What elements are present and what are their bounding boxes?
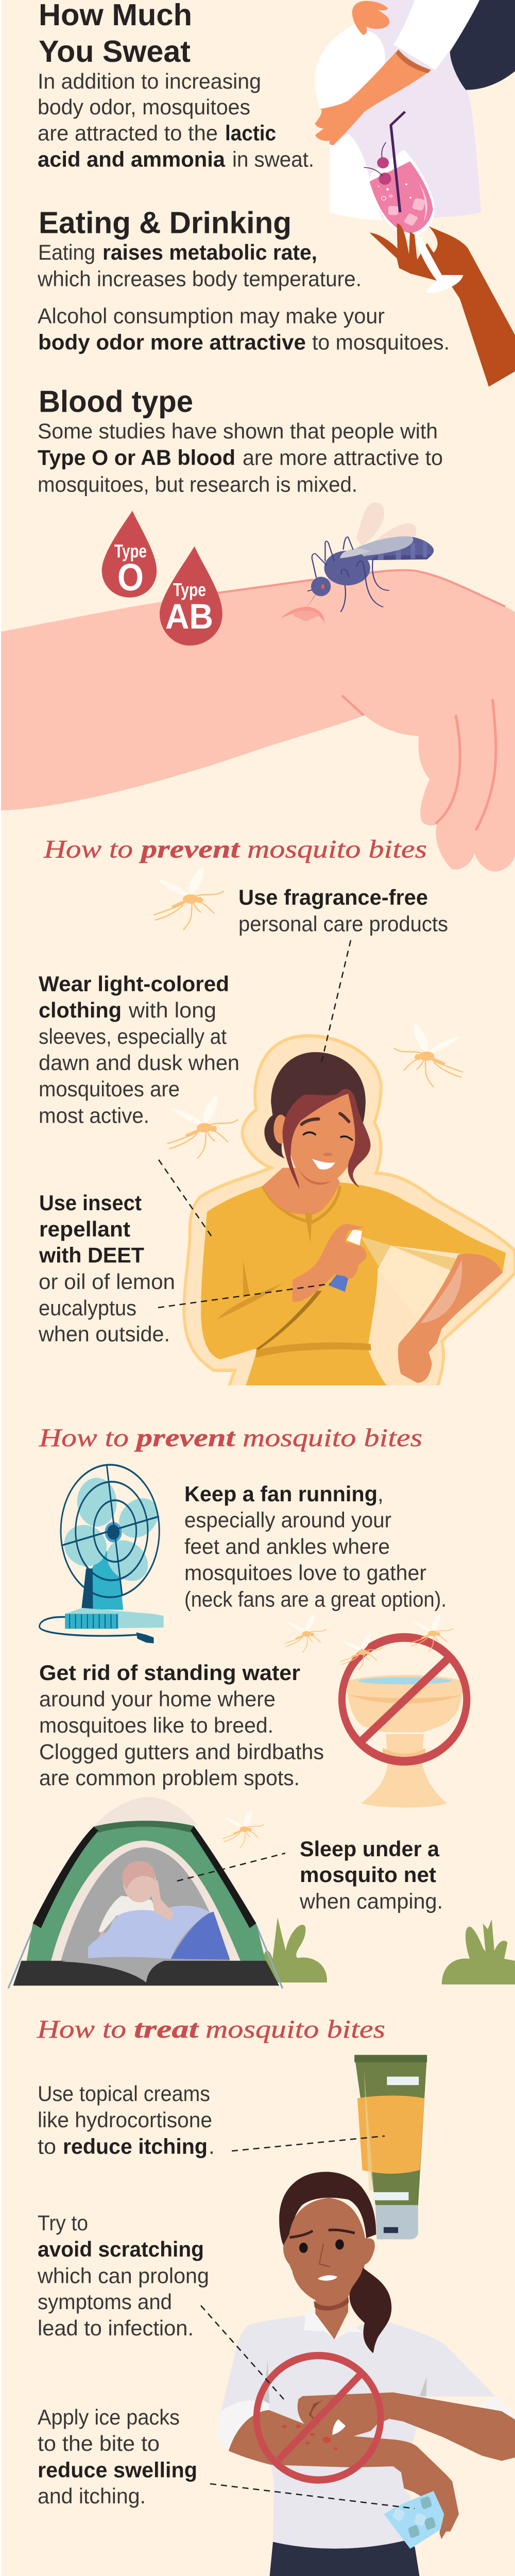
text: eating body: Eating (38, 240, 95, 264)
panel: how to prevent, personal protection (0, 835, 515, 1401)
leader line: repellant (158, 1284, 330, 1308)
heading: How to (37, 2014, 126, 2043)
bite mark (281, 607, 325, 624)
text: eating body: to mosquitoes. (312, 330, 450, 354)
text: standing water: Clogged gutters and birdbaths (39, 1740, 324, 1764)
text: repellant: or oil of lemon (39, 1269, 175, 1294)
tent (8, 1925, 283, 1988)
text: sweat body: acid and ammonia (38, 147, 226, 172)
text: clothing: most active. (39, 1104, 149, 1128)
text: clothing: clothing (39, 998, 122, 1022)
text: topical creams (38, 2081, 215, 2159)
text: sweat body: lactic (225, 121, 276, 145)
shirt (201, 1182, 506, 1385)
text: blood body: Some studies have shown that people with (38, 419, 438, 443)
text: eating body (37, 240, 450, 354)
ice pack (384, 2491, 444, 2549)
text: fan: , (377, 1482, 384, 1506)
text: fan: especially around your (184, 1508, 391, 1532)
text: repellant: with DEET (39, 1243, 144, 1267)
text: ice packs (38, 2405, 197, 2508)
left edge strip (0, 0, 1, 2576)
text: ice packs: reduce swelling (38, 2458, 197, 2482)
text: eating body: Alcohol consumption may make your (38, 304, 385, 328)
illustration: cream tube (354, 2055, 427, 2239)
text: net: Sleep under a (300, 1837, 440, 1861)
text: ice packs: Apply ice packs (38, 2405, 180, 2429)
heading (39, 1423, 422, 1452)
leader line: net (177, 1853, 285, 1881)
text: avoid scratching: lead to infection. (38, 2316, 194, 2340)
text: standing water: Get rid of standing water (39, 1660, 300, 1685)
text: net: when camping. (299, 1889, 443, 1913)
text: standing water: around your home where (39, 1687, 276, 1711)
illustration: people with cocktail (315, 0, 515, 387)
heading: How to (43, 835, 133, 863)
bushes (262, 1918, 327, 1982)
leader line: clothing (159, 1160, 213, 1238)
arms (229, 2410, 459, 2539)
icon: drop type AB: Type (173, 579, 206, 600)
text: clothing: dawn and dusk when (39, 1050, 239, 1075)
text: clothing: mosquitoes are (39, 1077, 180, 1101)
icon: drop type O: Type (114, 540, 147, 562)
heading: blood type: Blood type (39, 384, 193, 418)
panel: how to prevent, around home (8, 1423, 515, 1988)
text: eating body: body odor more attractive (38, 330, 306, 354)
icon: drop type AB: AB (165, 597, 213, 636)
skirt (270, 2540, 419, 2576)
text: avoid scratching: avoid scratching (38, 2237, 204, 2261)
text: topical creams: like hydrocortisone (38, 2108, 212, 2132)
illustration: tent and bushes (8, 1797, 515, 1988)
text: fan: (neck fans are a great option). (184, 1587, 447, 1612)
text: blood body: are more attractive to (243, 445, 443, 470)
text: eating body: which increases body temperature. (37, 267, 362, 291)
icon: mosquito 4 (285, 1614, 327, 1652)
heading (43, 835, 427, 863)
icon: mosquito 2 (394, 1023, 463, 1087)
arm (0, 570, 515, 872)
icon: fan (40, 1465, 164, 1643)
heading: How to (39, 1423, 129, 1452)
leader line: scratching (201, 2306, 284, 2400)
illustration: woman scratching (217, 2172, 515, 2576)
icon: mosquito 5 (340, 1633, 383, 1670)
glass (370, 149, 435, 236)
text: avoid scratching: which can prolong (37, 2263, 209, 2287)
text: sweat body: in sweat. (232, 147, 314, 172)
illustration: arm with mosquito (0, 502, 515, 872)
icon: mosquito 1 (153, 866, 224, 930)
shirt (217, 2315, 495, 2549)
text: net (299, 1837, 443, 1913)
text: standing water: mosquitoes like to breed. (39, 1713, 273, 1737)
text: standing water: are common problem spots. (39, 1766, 300, 1790)
text: fan: feet and ankles where (184, 1534, 390, 1558)
illustration: woman spraying repellent (184, 1036, 515, 1388)
heading: treat (134, 2014, 200, 2043)
text: clothing (39, 972, 239, 1128)
text: net: mosquito net (300, 1862, 436, 1887)
heading: how much you sweat (39, 0, 192, 69)
text: topical creams: Use topical creams (38, 2081, 210, 2106)
icon: drop type O (102, 511, 157, 599)
text: blood body (38, 419, 443, 497)
text: blood body: mosquitoes, but research is mixed. (38, 472, 357, 497)
icon: mosquito 3 (167, 1095, 238, 1159)
text: sweat body: body odor, mosquitoes (38, 95, 250, 119)
text: fragrance free (238, 885, 448, 936)
heading: eating and drinking: Eating & Drinking (39, 206, 291, 240)
heading: prevent (134, 1423, 236, 1452)
heading: mosquito bites (243, 1423, 422, 1452)
text: repellant: Use insect (39, 1191, 142, 1215)
leader line: cream (232, 2136, 385, 2151)
hand and spray (329, 1275, 349, 1292)
text: clothing: with long (128, 998, 216, 1022)
text: fan (184, 1482, 447, 1612)
icon: mosquito 7 (222, 1809, 264, 1848)
text: clothing: Wear light-colored (39, 972, 229, 996)
heading: how much you sweat: You Sweat (39, 35, 191, 69)
head (315, 2293, 348, 2340)
text: ice packs: and itching. (38, 2484, 146, 2508)
icon: birdbath crossed out (342, 1637, 467, 1807)
text: repellant: when outside. (38, 1322, 170, 1346)
icon: mosquito (305, 502, 434, 612)
text: avoid scratching: Try to (38, 2211, 88, 2235)
icon: drop type AB (160, 546, 222, 646)
text: repellant: repellant (39, 1217, 130, 1241)
icon: drop type O: O (117, 556, 144, 599)
forearm (398, 1253, 503, 1383)
text: avoid scratching (37, 2211, 209, 2340)
heading: mosquito bites (247, 835, 427, 863)
text: fan: Keep a fan running (184, 1482, 377, 1506)
text: topical creams: to (38, 2134, 56, 2159)
text: repellant (38, 1191, 175, 1346)
text: blood body: Type O or AB blood (38, 445, 235, 470)
text: clothing: sleeves, especially at (39, 1024, 227, 1048)
panel: how to treat (37, 2014, 515, 2576)
heading (37, 2014, 385, 2043)
head and hair (264, 1052, 366, 1159)
heading: prevent (139, 835, 241, 863)
icon: no scratching (256, 2355, 381, 2480)
text: topical creams: . (209, 2134, 215, 2159)
panel: how much you sweat and eating and drinking (0, 0, 515, 872)
text: sweat body (38, 69, 314, 172)
text: fragrance free: personal care products (238, 912, 448, 936)
text: sweat body: In addition to increasing (38, 69, 261, 93)
leader line: fragrance (321, 940, 351, 1063)
text: fan: mosquitoes love to gather (184, 1561, 426, 1585)
leader line: ice (210, 2484, 415, 2509)
text: topical creams: reduce itching (63, 2134, 208, 2159)
text: standing water (39, 1660, 324, 1790)
text: sweat body: are attracted to the (38, 121, 218, 145)
text: eating body: raises metabolic rate, (102, 240, 317, 264)
icon: mosquito 6 (410, 1614, 453, 1652)
text: fragrance free: Use fragrance-free (238, 885, 428, 909)
text: ice packs: to the bite to (38, 2431, 160, 2455)
text: repellant: eucalyptus (39, 1296, 136, 1320)
section band below illustration (0, 1385, 515, 1401)
heading: mosquito bites (205, 2014, 385, 2043)
text: avoid scratching: symptoms and (38, 2290, 172, 2314)
